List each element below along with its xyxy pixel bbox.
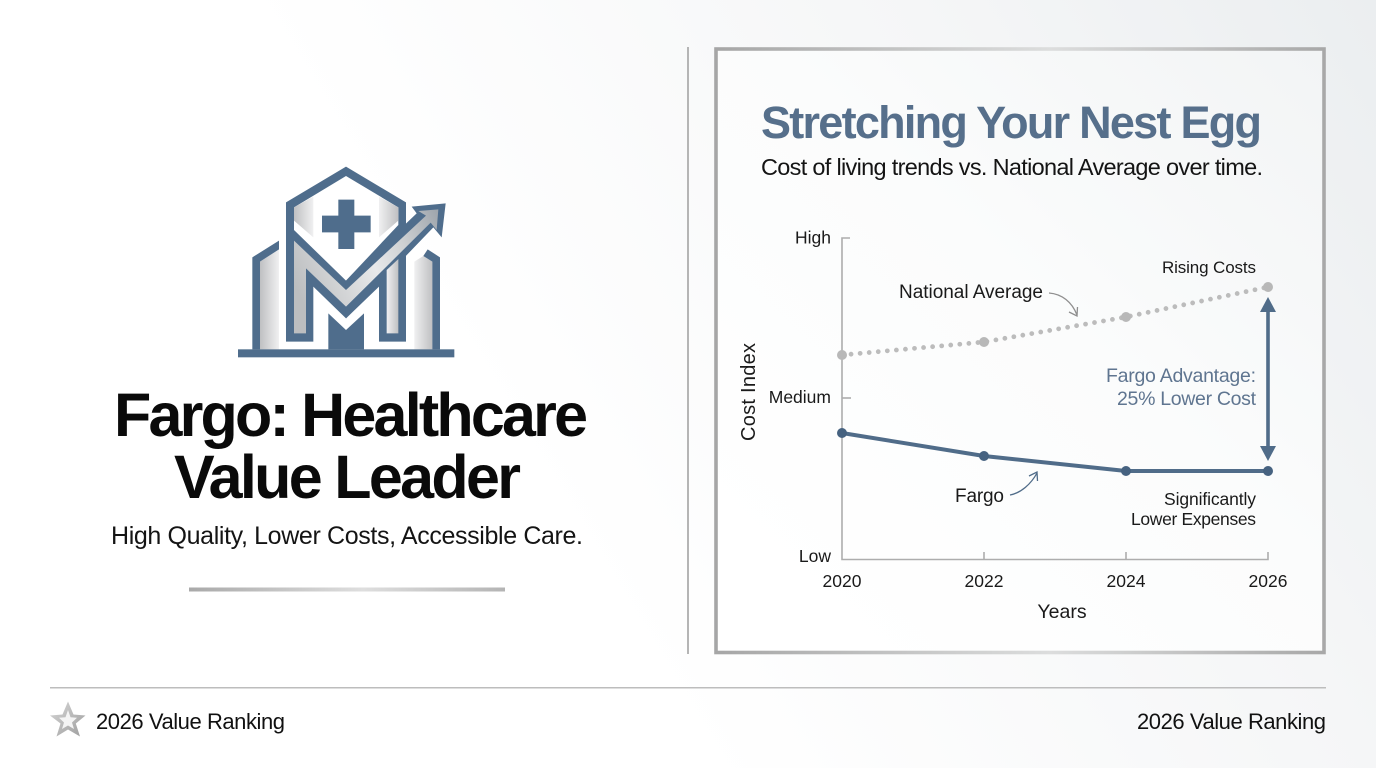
fargo line — [837, 428, 1273, 476]
x axis title: Years — [1037, 601, 1087, 623]
arrow: fargo advantage gap — [1260, 297, 1276, 461]
label: fargo advantage — [1106, 365, 1257, 410]
label: significantly lower expenses — [1131, 489, 1256, 529]
icon: silver star — [50, 702, 86, 736]
label: significantly lower expenses: Significantly — [1164, 489, 1256, 509]
y axis labels: Medium — [769, 387, 831, 407]
footer: left ranking — [50, 702, 285, 736]
title: Fargo: Healthcare — [114, 381, 588, 449]
house outline and M — [286, 167, 406, 342]
title: Value Leader — [174, 443, 521, 511]
footer left text: 2026 Value Ranking — [96, 709, 285, 734]
label: fargo advantage: Fargo Advantage: — [1106, 365, 1256, 387]
icon: medical cross — [322, 200, 371, 249]
base line — [238, 349, 454, 357]
arrow: national average pointer — [1049, 293, 1078, 316]
chart axes — [842, 238, 1268, 560]
y axis labels — [769, 228, 831, 566]
right building — [414, 249, 440, 349]
chart subtitle: Cost of living trends vs. National Average over time. — [761, 154, 1263, 180]
x axis labels: 2020 — [823, 571, 862, 591]
arrow: fargo pointer — [1010, 472, 1038, 495]
panel: cost of living chart — [716, 49, 1324, 652]
decorative rule — [189, 588, 505, 592]
x axis labels — [823, 571, 1287, 591]
icon: healthcare value logo — [238, 167, 454, 357]
right leg panel — [387, 259, 398, 333]
national average line — [837, 282, 1273, 360]
label: national average: National Average — [899, 282, 1043, 303]
x axis labels: 2024 — [1107, 571, 1146, 591]
x axis labels: 2026 — [1249, 571, 1287, 591]
icon: upward arrow — [346, 203, 446, 318]
y axis title: Cost Index — [738, 343, 760, 441]
x axis labels: 2022 — [965, 571, 1003, 591]
footer: right ranking: 2026 Value Ranking — [1137, 709, 1326, 734]
base block — [328, 313, 364, 349]
label: fargo advantage: 25% Lower Cost — [1117, 388, 1257, 410]
chart heading: Stretching Your Nest Egg — [761, 97, 1262, 148]
y axis labels: Low — [799, 546, 831, 566]
title — [114, 381, 588, 511]
label: significantly lower expenses: Lower Expenses — [1131, 509, 1256, 529]
subtitle: High Quality, Lower Costs, Accessible Care. — [111, 522, 583, 550]
label: rising costs: Rising Costs — [1162, 258, 1256, 277]
label: fargo: Fargo — [955, 486, 1004, 507]
y axis labels: High — [795, 228, 831, 248]
left building — [252, 241, 279, 349]
